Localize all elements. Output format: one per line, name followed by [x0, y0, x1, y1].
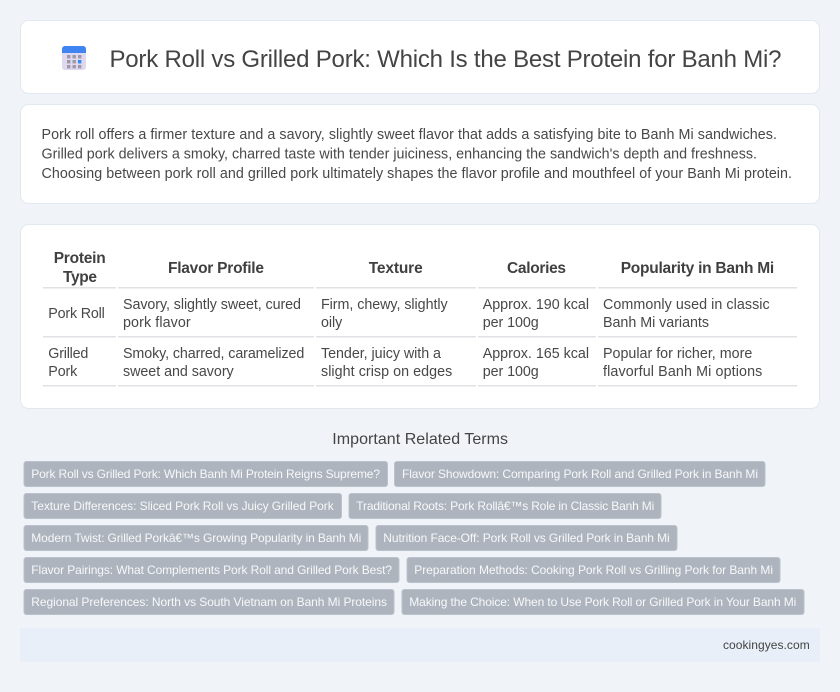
panel: comparison table — [20, 224, 820, 408]
table header row: Calories — [507, 260, 566, 277]
table header row — [54, 250, 774, 286]
panel: introduction — [20, 104, 820, 204]
tag — [376, 526, 677, 550]
intro paragraph: Choosing between pork roll and grilled pork ultimately shapes the flavor profile and mouthfeel of your Banh Mi protein. — [42, 166, 792, 182]
source credit: cookingyes.com — [723, 638, 810, 652]
tag: Making the Choice: When to Use Pork Roll or Grilled Pork in Your Banh Mi — [409, 595, 796, 609]
table row: pork roll: Savory, slightly sweet, cured — [123, 297, 301, 313]
tag — [349, 494, 661, 518]
table row: grilled pork: per 100g — [483, 364, 539, 380]
tag — [394, 462, 765, 486]
tag: Regional Preferences: North vs South Vietnam on Banh Mi Proteins — [31, 595, 387, 609]
header card — [20, 20, 820, 94]
table row: grilled pork: Tender, juicy with a — [321, 346, 441, 362]
tag: Flavor Pairings: What Complements Pork Roll and Grilled Pork Best? — [31, 563, 392, 577]
table row: pork roll: Approx. 190 kcal — [483, 297, 589, 313]
intro paragraph: Pork roll offers a firmer texture and a savory, slightly sweet flavor that adds a satisfying bite to Banh Mi sandwiches. — [42, 127, 777, 143]
table header row: Flavor Profile — [168, 260, 264, 277]
table row: grilled pork: Approx. 165 kcal — [483, 346, 589, 362]
table rules — [43, 287, 797, 386]
table header row: Protein — [54, 250, 106, 267]
tag: Nutrition Face-Off: Pork Roll vs Grilled Pork in Banh Mi — [383, 531, 670, 545]
table header row: Texture — [369, 260, 423, 277]
title: Pork Roll vs Grilled Pork: Which Is the Best Protein for Banh Mi? — [110, 46, 782, 73]
panel: related term tags — [24, 462, 804, 614]
footer bar — [20, 628, 820, 662]
table card — [20, 224, 820, 408]
table row: pork roll: Commonly used in classic — [603, 297, 770, 313]
table header row: Type — [63, 269, 97, 286]
table row: grilled pork: Pork — [48, 364, 78, 380]
table row: grilled pork: slight crisp on edges — [321, 364, 452, 380]
panel: title header — [20, 20, 820, 94]
tag — [402, 590, 804, 614]
tag — [24, 590, 394, 614]
tag: Pork Roll vs Grilled Pork: Which Banh Mi Protein Reigns Supreme? — [31, 467, 380, 481]
table row: grilled pork: sweet and savory — [123, 364, 235, 380]
tag — [407, 558, 780, 582]
icon: calendar — [62, 46, 86, 70]
table row: pork roll: per 100g — [483, 315, 539, 331]
table row: grilled pork: Smoky, charred, caramelized — [123, 346, 304, 362]
footer — [20, 628, 820, 662]
tag: Traditional Roots: Pork Rollâ€™s Role in Classic Banh Mi — [356, 499, 654, 513]
table row: pork roll: Pork Roll — [48, 306, 105, 322]
tag — [24, 526, 368, 550]
table row: pork roll: pork flavor — [123, 315, 191, 331]
table row: pork roll: Banh Mi variants — [603, 315, 709, 331]
tag — [24, 558, 399, 582]
table header row: Popularity in Banh Mi — [621, 260, 774, 277]
table row: pork roll: oily — [321, 315, 343, 331]
tag: Modern Twist: Grilled Porkâ€™s Growing Popularity in Banh Mi — [31, 531, 361, 545]
tag: Preparation Methods: Cooking Pork Roll vs Grilling Pork for Banh Mi — [414, 563, 773, 577]
table row: grilled pork: Popular for richer, more — [603, 346, 752, 362]
heading: related terms: Important Related Terms — [332, 431, 508, 448]
table row: grilled pork — [48, 346, 762, 380]
table row: grilled pork: flavorful Banh Mi options — [603, 364, 762, 380]
tag — [24, 494, 342, 518]
table row: pork roll: Firm, chewy, slightly — [321, 297, 449, 313]
tag: Texture Differences: Sliced Pork Roll vs Juicy Grilled Pork — [31, 499, 335, 513]
table row: grilled pork: Grilled — [48, 346, 88, 362]
intro paragraph: Grilled pork delivers a smoky, charred taste with tender juiciness, enhancing the sandwich's depth and freshness. — [42, 146, 757, 162]
table row: pork roll — [48, 297, 770, 331]
intro paragraph — [42, 127, 792, 182]
tag — [24, 462, 388, 486]
tag: Flavor Showdown: Comparing Pork Roll and Grilled Pork in Banh Mi — [402, 467, 758, 481]
intro card — [20, 104, 820, 204]
